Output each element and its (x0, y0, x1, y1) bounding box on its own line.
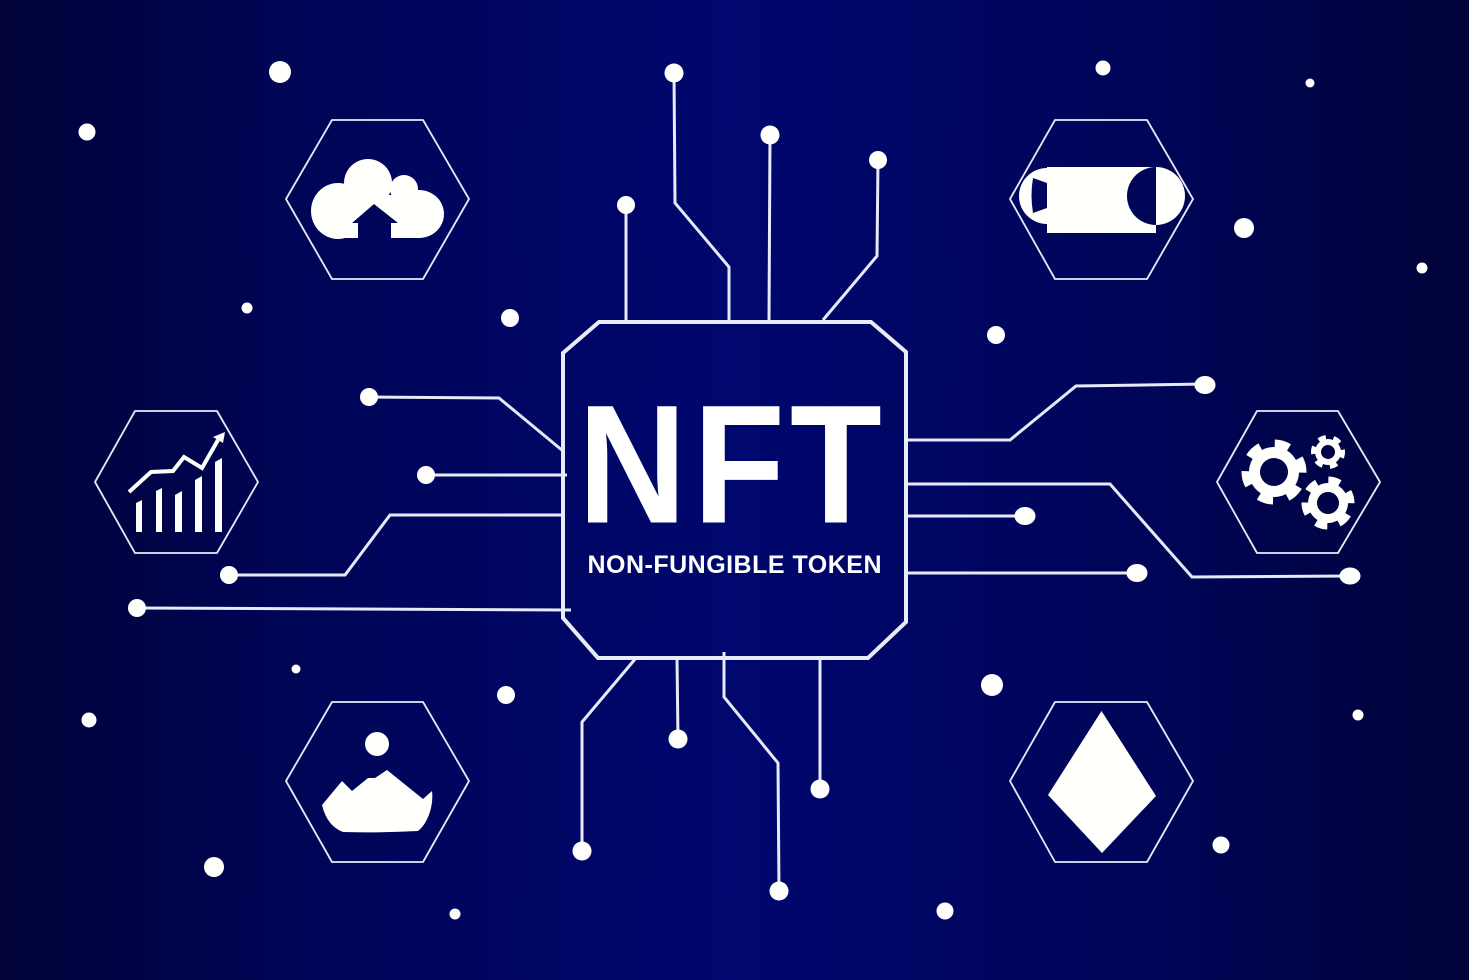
hexagon frame (286, 702, 469, 862)
icon: diamond (1048, 711, 1156, 853)
panel: gears (1217, 411, 1380, 553)
circuit lines (137, 73, 1349, 891)
icon: bar chart with arrow (129, 432, 225, 532)
panel: diamond (1010, 702, 1193, 862)
hexagon frame (1010, 120, 1193, 279)
icon: sun (365, 732, 389, 756)
icon: ticket shape (1019, 167, 1185, 233)
panel: image landscape (286, 702, 469, 862)
NFT heading: NFT (578, 369, 882, 558)
icon: medium gear (1298, 473, 1358, 533)
panel: growth chart (95, 411, 258, 553)
hexagon frame (286, 120, 469, 279)
panel: cloud home (286, 120, 469, 279)
icon: large gear (1237, 435, 1311, 509)
icon: cloud with house (311, 159, 444, 242)
hexagon frame (1010, 702, 1193, 862)
panel: ticket (1010, 120, 1193, 279)
central chip (563, 322, 906, 658)
hexagon frame (95, 411, 258, 553)
icon: mountains (322, 770, 432, 832)
circuit terminal dots (128, 64, 1360, 900)
subtitle: NON-FUNGIBLE TOKEN (588, 551, 882, 579)
hexagon frame (1217, 411, 1380, 553)
icon: small gear (1312, 436, 1344, 468)
chip outline (563, 322, 906, 658)
